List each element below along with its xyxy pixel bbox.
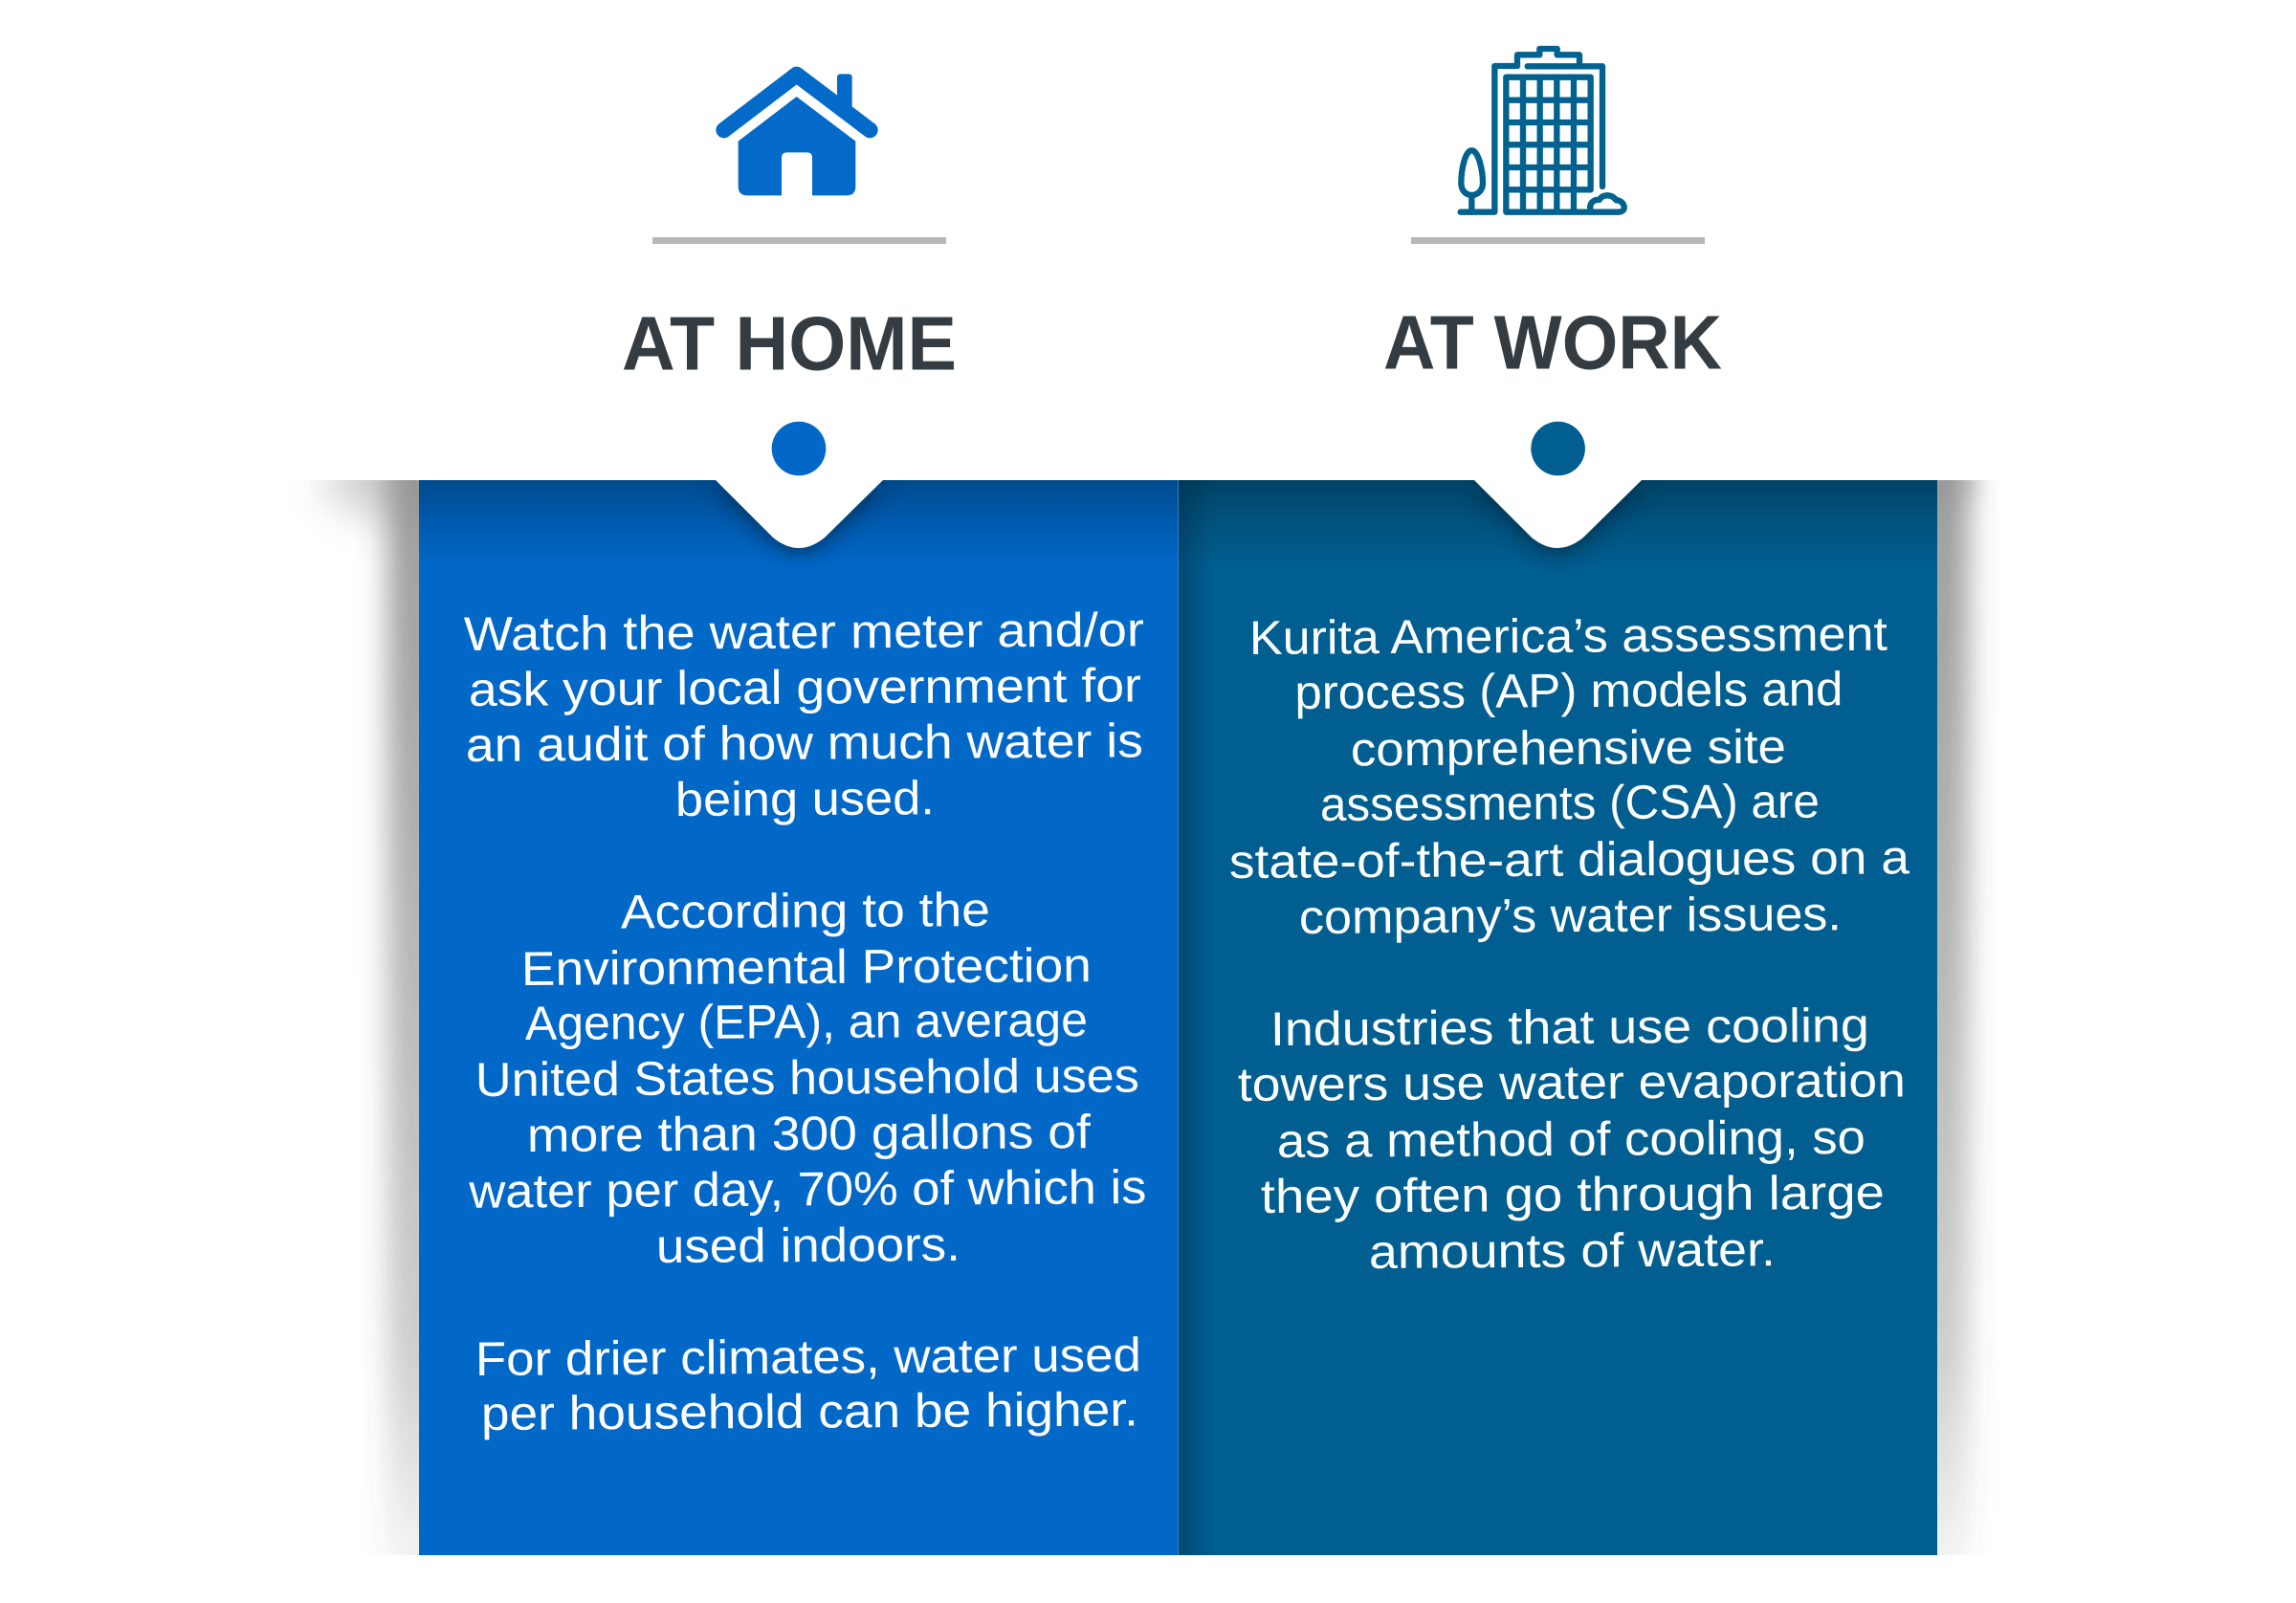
text: at work paragraph 1: company’s water issues.: [1299, 887, 1842, 944]
text: at work paragraph 1: assessments (CSA) are: [1320, 775, 1820, 831]
text: at work paragraph 2: amounts of water.: [1369, 1222, 1776, 1279]
text: at home paragraph 2: Environmental Protection: [521, 938, 1092, 996]
text: at work paragraph 2: as a method of cooling, so: [1277, 1110, 1866, 1168]
text: at home paragraph 2: used indoors.: [656, 1218, 960, 1273]
panel side shadows: [325, 438, 1978, 1578]
text: at home paragraph 2: United States household uses: [475, 1048, 1139, 1107]
divider: at home: [652, 237, 946, 244]
text: at work paragraph 2: towers use water evaporation: [1238, 1053, 1906, 1111]
text: at work paragraph 1: [1229, 607, 1910, 944]
text: at home paragraph 3: per household can be higher.: [481, 1382, 1138, 1440]
text: at work paragraph 2: [1238, 999, 1906, 1279]
marker dot: at home: [772, 422, 826, 475]
text: at home paragraph 2: Agency (EPA), an average: [525, 993, 1088, 1050]
text: at home paragraph 3: For drier climates, water used: [475, 1328, 1141, 1386]
text: at home paragraph 1: ask your local government for: [469, 658, 1141, 716]
text: at work paragraph 1: process (AP) models and: [1294, 662, 1843, 719]
panel: at home background: [419, 480, 1179, 1555]
text: at work paragraph 2: Industries that use cooling: [1270, 999, 1869, 1056]
text: at work paragraph 1: comprehensive site: [1351, 719, 1786, 776]
text: at home paragraph 2: water per day, 70% of which is: [468, 1160, 1147, 1219]
heading: at work: AT WORK: [1383, 300, 1722, 384]
text: at home paragraph 2: According to the: [621, 883, 990, 938]
notch: at work: [1473, 479, 1643, 548]
heading: at home: AT HOME: [622, 300, 957, 386]
icon: house: [724, 74, 870, 195]
divider: at work: [1411, 237, 1705, 244]
text: at home paragraph 1: being used.: [675, 771, 935, 826]
text: at work paragraph 1: state-of-the-art dialogues on a: [1229, 830, 1910, 889]
text: at home paragraph 3: [475, 1328, 1141, 1440]
notch: at home: [715, 479, 884, 548]
text: at home paragraph 1: [464, 603, 1144, 826]
text: at home paragraph 2: more than 300 gallons of: [527, 1105, 1091, 1162]
marker dot: at work: [1531, 422, 1585, 475]
text: at home paragraph 1: Watch the water meter and/or: [464, 603, 1144, 661]
notch shadows: [715, 485, 1643, 553]
text: at work paragraph 2: they often go through large: [1261, 1166, 1885, 1223]
panel: at work background: [1179, 480, 1937, 1555]
text: at work paragraph 1: Kurita America’s assessment: [1249, 607, 1888, 665]
text: at home paragraph 1: an audit of how much water is: [466, 714, 1143, 772]
text: at home paragraph 2: [468, 883, 1147, 1273]
icon: office building with tree and bush: [1461, 49, 1624, 212]
